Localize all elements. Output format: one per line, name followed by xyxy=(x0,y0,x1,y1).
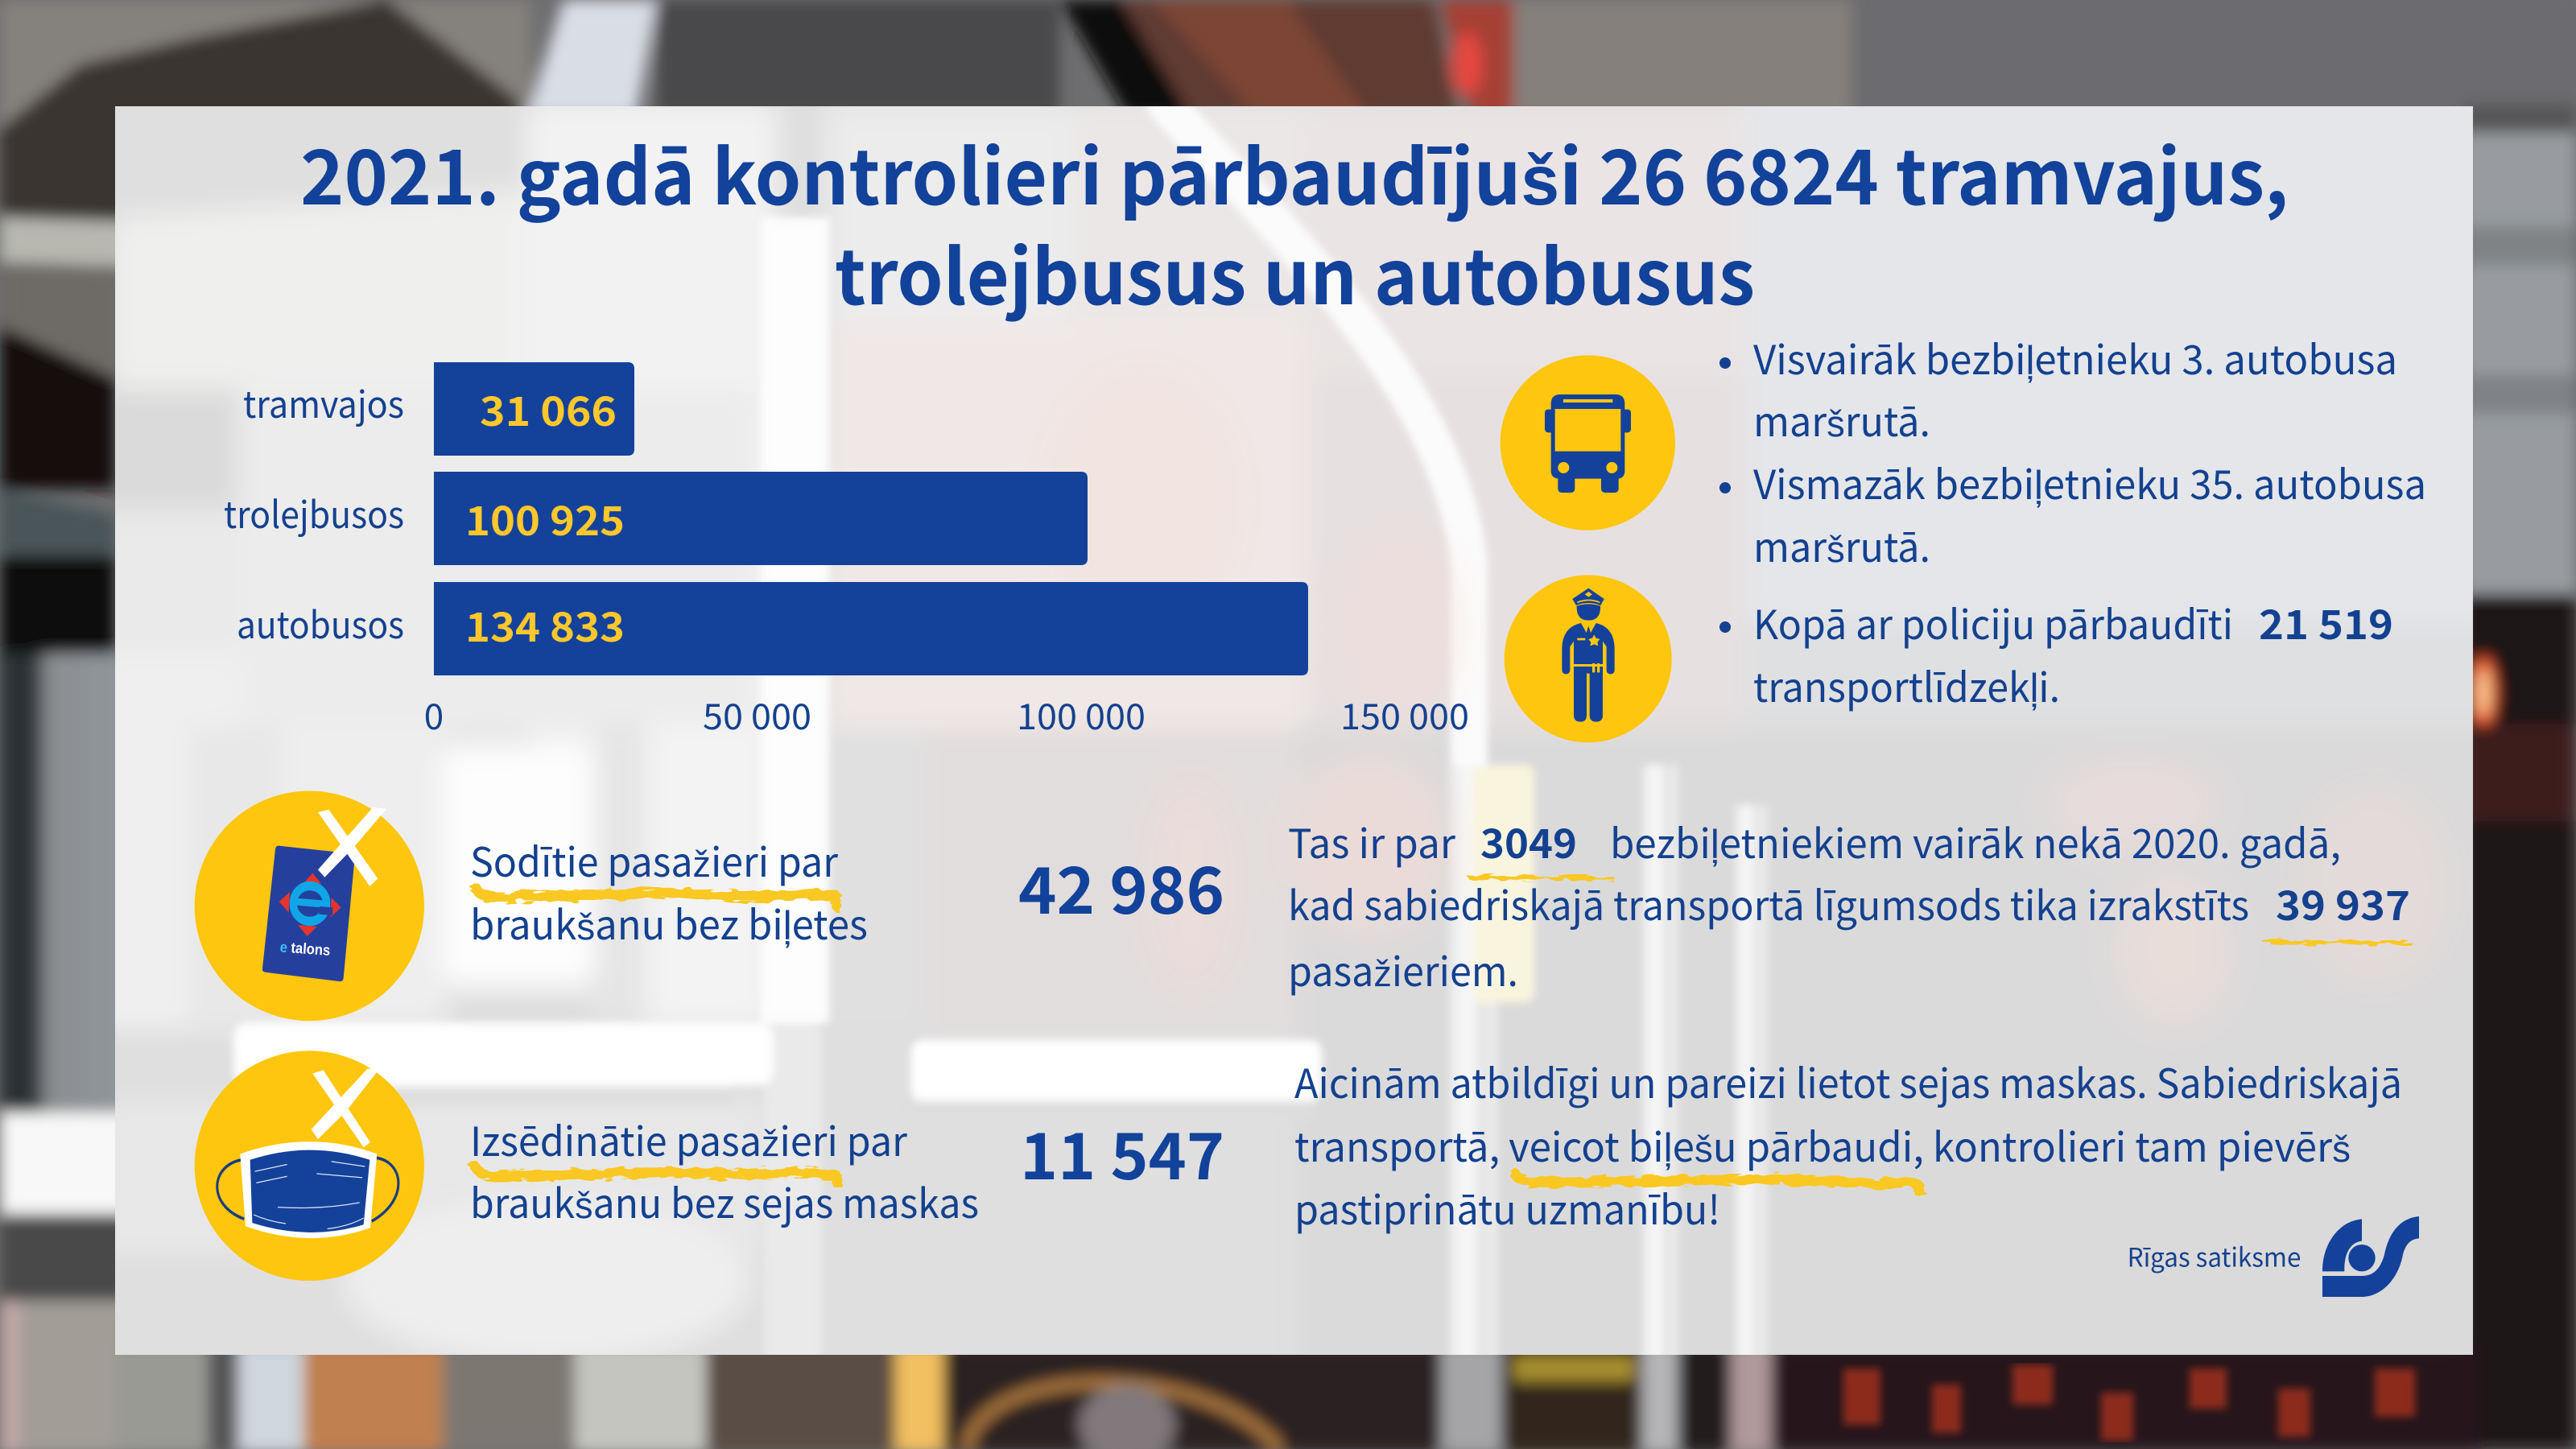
squiggle underline xyxy=(475,887,837,906)
bar: trolejbusos xyxy=(224,472,1088,565)
text: mask appeal: pastiprinātu uzmanību! xyxy=(1294,1179,1720,1236)
chart axis: 150 000 xyxy=(1340,688,1469,740)
chart axis: 100 000 xyxy=(1017,688,1146,740)
bullet list: route and police facts: transportlīdzekļi. xyxy=(1753,656,2060,714)
text: passengers without masks xyxy=(470,1110,979,1230)
stat: 11 547: 11 547 xyxy=(1020,1105,1224,1199)
logo: Rīgas satiksme xyxy=(2128,1216,2419,1297)
bullet list: route and police facts: 21 519 xyxy=(2259,593,2393,651)
icon: e-talons ticket crossed out xyxy=(195,791,424,1021)
title: trolejbusus un autobusus xyxy=(835,217,1755,327)
text: comparison with 2020: kad sabiedriskajā transportā līgumsods tika izrakstīts xyxy=(1288,874,2249,932)
text: comparison with 2020 xyxy=(1288,812,2410,998)
chart axis: 0 xyxy=(424,688,444,740)
yellow handle xyxy=(1472,765,1534,1002)
red speckled lights bottom right xyxy=(1843,1364,2415,1441)
left outside column xyxy=(0,217,242,274)
bullet list: route and police facts xyxy=(1719,328,2426,714)
bar: autobusos: autobusos xyxy=(237,597,404,650)
text: comparison with 2020: 3049 xyxy=(1480,812,1577,870)
icon: police officer xyxy=(1505,575,1672,742)
chart axis xyxy=(424,688,1469,740)
squiggle underline xyxy=(1468,876,1613,879)
bar: tramvajos: 31 066 xyxy=(480,380,617,438)
bullet list: route and police facts: Kopā ar policiju pārbaudīti xyxy=(1753,593,2233,651)
squiggle underline xyxy=(1515,1174,1919,1191)
rails xyxy=(233,1022,773,1085)
icon: e-talons ticket crossed out: e talons xyxy=(279,938,331,959)
text: comparison with 2020: Tas ir par xyxy=(1288,812,1456,870)
translucent white panel xyxy=(115,106,2473,1355)
curved grab pole xyxy=(1159,97,1469,765)
text: comparison with 2020: pasažieriem. xyxy=(1288,940,1518,998)
squiggle underline xyxy=(475,1166,837,1183)
chart axis: 50 000 xyxy=(703,688,811,740)
stat: 42 986: 42 986 xyxy=(1018,840,1224,933)
text: passengers without masks: Izsēdinātie pasažieri par xyxy=(470,1110,908,1168)
bullet list: route and police facts: Vismazāk bezbiļetnieku 35. autobusa xyxy=(1753,453,2426,511)
bar: tramvajos xyxy=(243,362,634,456)
title: 2021. gadā kontrolieri pārbaudījuši 26 6824 tramvajus, xyxy=(300,118,2289,227)
top left warm grey xyxy=(0,0,531,225)
pillar xyxy=(761,217,829,1022)
bullet list: route and police facts: maršrutā. xyxy=(1753,390,1930,448)
text: comparison with 2020: bezbiļetniekiem vairāk nekā 2020. gadā, xyxy=(1610,812,2341,870)
text: mask appeal: Aicinām atbildīgi un pareizi lietot sejas maskas. Sabiedriskajā xyxy=(1294,1052,2402,1110)
bullet list: route and police facts: maršrutā. xyxy=(1753,516,1930,574)
text: fined passengers: braukšanu bez biļetes xyxy=(470,894,868,952)
text: passengers without masks: braukšanu bez sejas maskas xyxy=(470,1172,979,1230)
bottom strip xyxy=(115,1344,208,1449)
bar: tramvajos: tramvajos xyxy=(243,376,404,429)
bar: autobusos: 134 833 xyxy=(465,596,625,654)
text: mask appeal: transportā, veicot biļešu pārbaudi, kontrolieri tam pievērš xyxy=(1294,1116,2351,1174)
squiggle underline xyxy=(2264,940,2410,943)
text: mask appeal xyxy=(1294,1052,2402,1236)
icon: bus xyxy=(1501,355,1675,530)
text: fined passengers: Sodītie pasažieri par xyxy=(470,831,839,889)
bar chart: inspected vehicles xyxy=(224,362,1469,740)
title xyxy=(300,118,2289,327)
top strip xyxy=(527,0,657,117)
text: fined passengers xyxy=(470,831,868,952)
bullet list: route and police facts: Visvairāk bezbiļetnieku 3. autobusa xyxy=(1753,328,2397,386)
logo: Rīgas satiksme: Rīgas satiksme xyxy=(2128,1237,2301,1274)
bar: trolejbusos: 100 925 xyxy=(465,489,625,547)
bar: trolejbusos: trolejbusos xyxy=(224,486,404,539)
text: comparison with 2020: 39 937 xyxy=(2276,874,2410,932)
icon: face mask crossed out xyxy=(195,1051,424,1281)
bar: autobusos xyxy=(237,582,1308,675)
